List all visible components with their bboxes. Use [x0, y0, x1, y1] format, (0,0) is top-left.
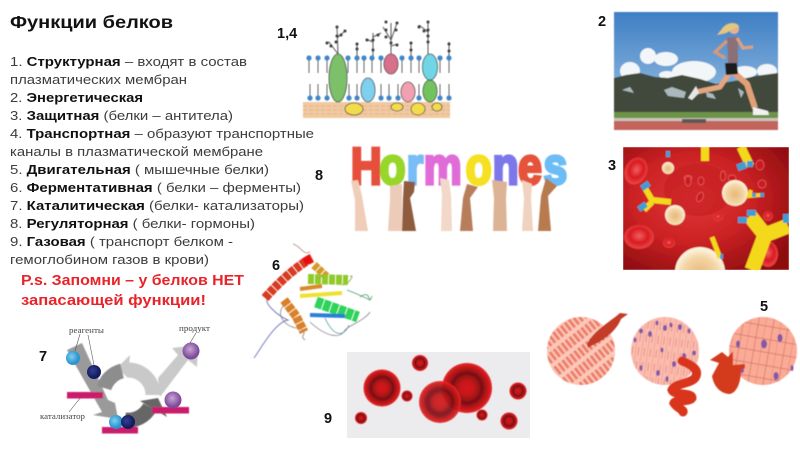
- product arrow and light ring segment: [117, 345, 198, 397]
- illustration: Hormones word held by hands: o: [466, 138, 492, 196]
- illustration: catalyst reaction cycle: продукт: [179, 323, 210, 333]
- illustration: antibodies in a blood vessel: [623, 147, 789, 270]
- medium ring segment: [104, 371, 122, 388]
- list of protein functions: плазматических мембран: [10, 72, 187, 87]
- list of protein functions: 6. Ферментативная ( белки – ферменты): [10, 180, 301, 195]
- illustration: red blood cells: [347, 352, 530, 438]
- illustration: Hormones word held by hands: n: [493, 138, 519, 196]
- label 8: 8: [315, 168, 323, 184]
- left incoming arrow: [67, 343, 118, 419]
- dark ring segment: [125, 398, 167, 420]
- illustration: Hormones word held by hands: r: [407, 138, 423, 196]
- callout: P.s. note: [21, 273, 244, 309]
- illustration: Hormones word held by hands: m: [424, 138, 462, 196]
- label 5: 5: [760, 299, 768, 315]
- illustration: muscle tissue types: [547, 313, 797, 412]
- callout: P.s. note: P.s. Запомни – у белков НЕТ: [21, 273, 244, 289]
- list of protein functions: 9. Газовая ( транспорт белком -: [10, 234, 233, 249]
- list of protein functions: гемоглобином газов в крови): [10, 252, 209, 267]
- list of protein functions: 4. Транспортная – образуют транспортные: [10, 126, 314, 141]
- list of protein functions: 7. Каталитическая (белки- катализаторы): [10, 198, 304, 213]
- illustration: Hormones word held by hands: o: [380, 138, 406, 196]
- list of protein functions: 1. Структурная – входят в состав: [10, 54, 247, 69]
- list of protein functions: 2. Энергетическая: [10, 90, 143, 105]
- label 9: 9: [324, 411, 332, 427]
- label 6: 6: [272, 258, 280, 274]
- illustration: catalyst reaction cycle: реагенты: [69, 325, 104, 335]
- callout: P.s. note: запасающей функции!: [21, 293, 206, 309]
- illustration: Hormones word held by hands: s: [544, 138, 567, 196]
- illustration: cell membrane with proteins: [303, 20, 452, 118]
- list of protein functions: 3. Защитная (белки – антитела): [10, 108, 233, 123]
- label 2: 2: [598, 14, 606, 30]
- list of protein functions: [10, 54, 314, 267]
- photo: runner on a track: [614, 12, 778, 130]
- label 1,4: 1,4: [277, 26, 297, 42]
- list of protein functions: 8. Регуляторная ( белки- гормоны): [10, 216, 255, 231]
- illustration: protein ribbon structure: [254, 244, 372, 358]
- label 7: 7: [39, 349, 47, 365]
- list of protein functions: каналы в плазматической мембране: [10, 144, 263, 159]
- title: Функции белков: [10, 12, 173, 32]
- illustration: catalyst reaction cycle: катализатор: [40, 411, 85, 421]
- illustration: catalyst reaction cycle: [40, 323, 210, 434]
- illustration: Hormones word held by hands: H: [351, 138, 382, 196]
- label 3: 3: [608, 158, 616, 174]
- illustration: Hormones word held by hands: e: [518, 138, 542, 196]
- illustration: Hormones word held by hands: [351, 138, 567, 231]
- list of protein functions: 5. Двигательная ( мышечные белки): [10, 162, 269, 177]
